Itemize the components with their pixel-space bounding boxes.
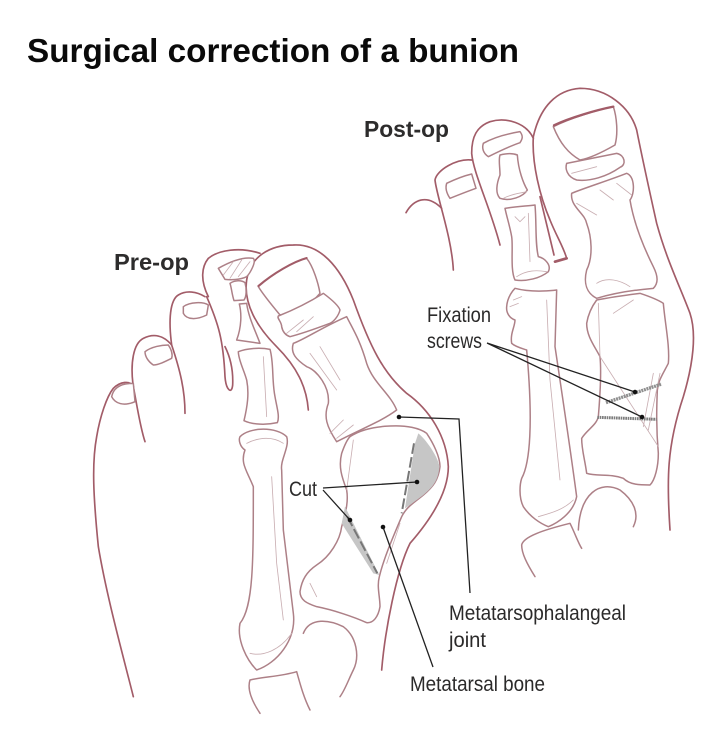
label: Metatarsophalangeal joint: joint	[448, 629, 486, 652]
shaded bone wedge	[405, 433, 439, 508]
pre-op lower bones	[249, 621, 357, 713]
label: Metatarsal bone: Metatarsal bone	[410, 673, 545, 696]
label: Pre-op: Pre-op	[114, 249, 189, 275]
post-op toes and foot outline	[406, 88, 693, 530]
label: Fixation screws: Fixation	[427, 304, 491, 327]
leader lines: cut	[323, 480, 419, 522]
title: Surgical correction of a bunion	[27, 32, 519, 69]
pre-op foot illustration	[94, 245, 448, 713]
label: Fixation screws	[427, 304, 491, 353]
post-op big toe bones	[553, 107, 669, 485]
pre-op toes and foot outline	[94, 245, 448, 697]
post-op foot illustration	[406, 88, 693, 577]
pre-op first metatarsal with cuts	[300, 426, 440, 623]
label: Metatarsophalangeal joint	[448, 602, 626, 652]
pre-op big toe bones	[258, 258, 397, 442]
label: Fixation screws: screws	[427, 330, 482, 353]
pre-op second toe bones	[218, 258, 294, 670]
leader line: metatarsal bone	[381, 525, 433, 667]
leader line: metatarsophalangeal joint	[397, 415, 470, 593]
shaded cut strip	[342, 507, 379, 575]
post-op second and third toe bones	[446, 132, 577, 527]
label: Cut: Cut	[289, 478, 317, 501]
label: Post-op: Post-op	[364, 116, 449, 142]
post-op lower bones	[522, 487, 636, 577]
label: Metatarsophalangeal joint: Metatarsophalangeal	[449, 602, 626, 625]
leader lines: fixation screws	[487, 343, 644, 419]
post-op fixation screws	[597, 384, 662, 419]
